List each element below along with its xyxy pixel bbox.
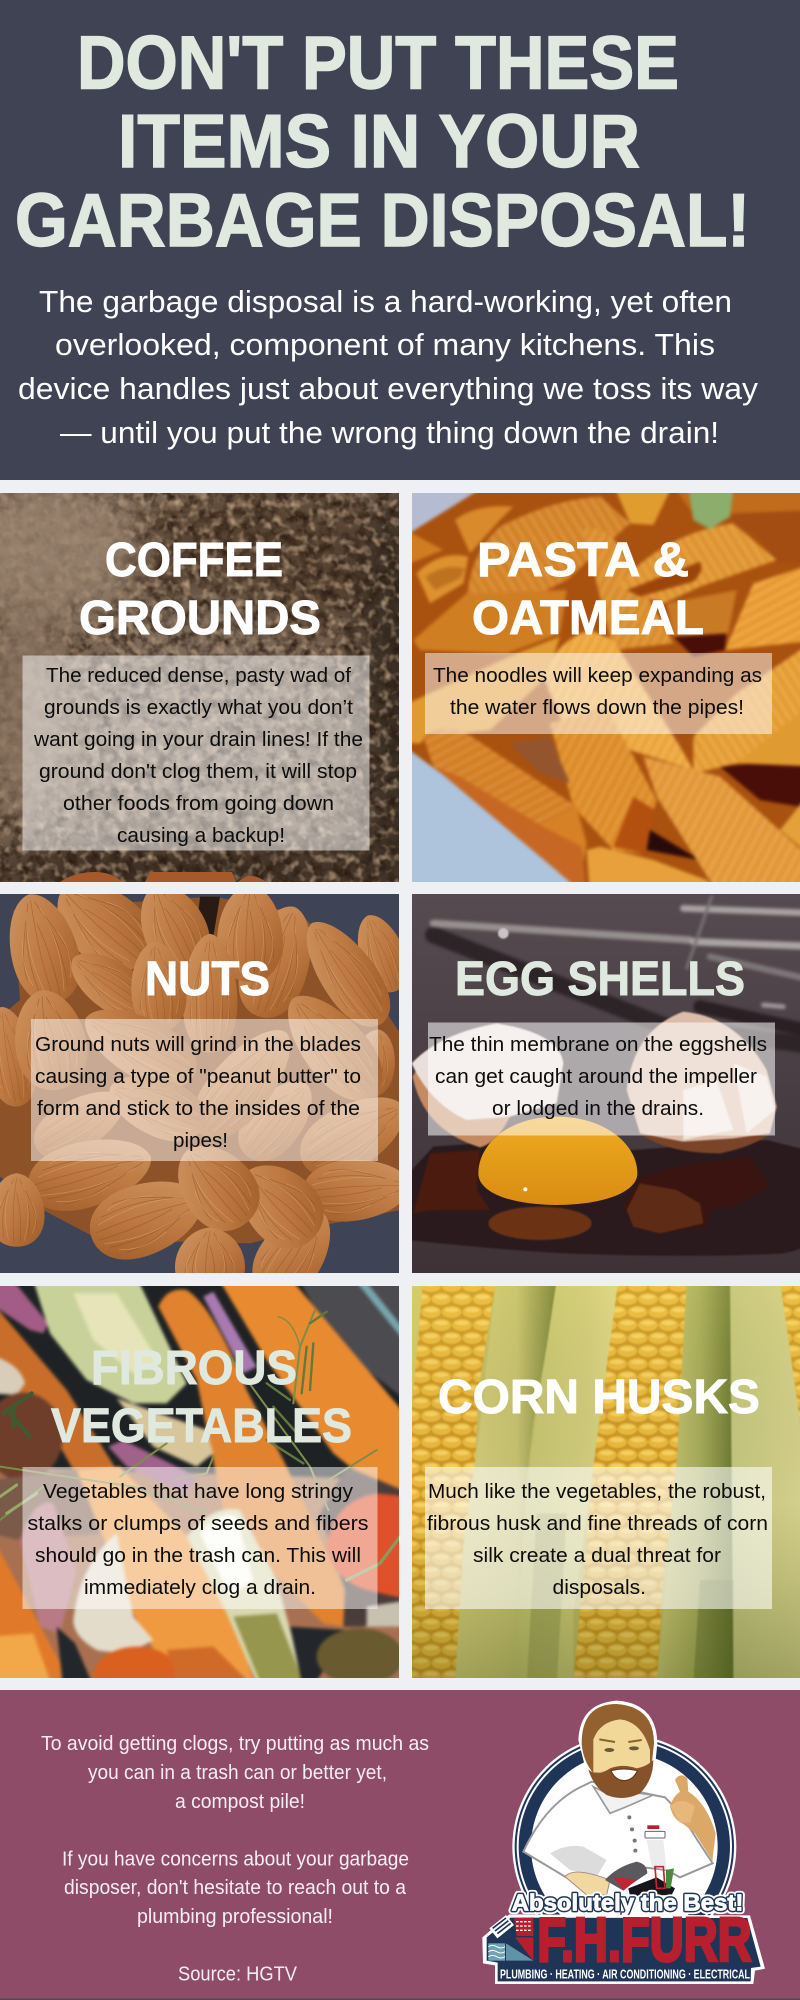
text box: should go in the trash can. This will <box>35 1544 361 1567</box>
text box: Much like the vegetables, the robust, <box>428 1480 766 1503</box>
text box: The reduced dense, pasty wad of <box>46 664 351 687</box>
intro text: — until you put the wrong thing down the drain! <box>60 415 719 450</box>
tagline: Absolutely the Best! <box>512 1890 743 1916</box>
text box: causing a backup! <box>117 824 285 847</box>
heading: COFFEE <box>105 534 283 587</box>
photo: corn cobs <box>407 1280 800 1683</box>
text box <box>425 1467 772 1609</box>
text box <box>428 1022 775 1136</box>
panel: pasta and oatmeal <box>412 493 800 882</box>
text box: The noodles will keep expanding as <box>433 664 762 687</box>
footer text: you can in a trash can or better yet, <box>88 1761 387 1784</box>
banner <box>482 1914 765 1984</box>
text box: other foods from going down <box>63 792 334 815</box>
intro text <box>18 284 759 450</box>
intro text: The garbage disposal is a hard-working, yet often <box>39 284 732 319</box>
footer text: plumbing professional! <box>137 1905 333 1928</box>
footer text: To avoid getting clogs, try putting as much as <box>41 1732 429 1755</box>
text box <box>22 1467 378 1609</box>
panel: coffee grounds <box>0 493 399 882</box>
heading: FIBROUS <box>91 1342 297 1395</box>
text box: causing a type of "peanut butter" to <box>35 1065 361 1088</box>
logo: F.H. Furr mascot and wordmark <box>482 1701 765 1984</box>
text box <box>22 656 370 850</box>
title: ITEMS IN YOUR <box>118 99 640 183</box>
heading: CORN HUSKS <box>438 1371 760 1424</box>
photo: almonds <box>0 894 399 1273</box>
photo: cracked egg <box>393 894 800 1273</box>
panel: header <box>0 0 800 480</box>
heading: GROUNDS <box>79 592 321 645</box>
title: DON'T PUT THESE <box>77 20 679 104</box>
footer text: Source: HGTV <box>178 1962 297 1986</box>
intro text: device handles just about everything we toss its way <box>18 371 759 406</box>
text box: the water flows down the pipes! <box>450 696 744 719</box>
heading: VEGETABLES <box>51 1400 352 1453</box>
photo: coffee grounds <box>0 493 399 882</box>
tagline: Absolutely the Best! <box>512 1890 743 1916</box>
text box: The thin membrane on the eggshells <box>429 1033 767 1056</box>
text box: ground don't clog them, it will stop <box>39 760 357 783</box>
mascot <box>523 1701 716 1895</box>
text box <box>425 653 772 734</box>
text box: immediately clog a drain. <box>84 1576 316 1599</box>
text box: grounds is exactly what you don’t <box>44 696 353 719</box>
photo: roasted vegetables <box>0 1286 399 1678</box>
text box: stalks or clumps of seeds and fibers <box>28 1512 368 1535</box>
text box: or lodged in the drains. <box>492 1097 704 1120</box>
text box: disposals. <box>552 1576 646 1599</box>
text box: fibrous husk and fine threads of corn <box>427 1512 768 1535</box>
footer text <box>41 1732 429 1986</box>
title <box>15 20 750 262</box>
heading: PASTA & <box>477 534 689 587</box>
panel: footer <box>0 1690 800 2000</box>
panel: nuts <box>0 894 399 1273</box>
wordmark icon <box>488 1915 533 1961</box>
heading <box>51 1342 352 1453</box>
text box: silk create a dual threat for <box>473 1544 721 1567</box>
text box: form and stick to the insides of the <box>37 1097 360 1120</box>
tagline: Absolutely the Best! <box>512 1890 743 1916</box>
text box <box>31 1019 378 1161</box>
logo badge ring <box>512 1735 736 1959</box>
text box: Ground nuts will grind in the blades <box>35 1033 361 1056</box>
panel: egg shells <box>393 894 800 1273</box>
heading <box>79 534 321 645</box>
text box: Vegetables that have long stringy <box>43 1480 354 1503</box>
text box: can get caught around the impeller <box>435 1065 757 1088</box>
intro text: overlooked, component of many kitchens. This <box>55 327 715 362</box>
footer text: If you have concerns about your garbage <box>62 1848 409 1870</box>
photo: penne pasta <box>412 493 800 882</box>
heading: NUTS <box>145 953 270 1006</box>
panel: fibrous vegetables <box>0 1286 399 1678</box>
footer text: a compost pile! <box>175 1790 305 1813</box>
heading: OATMEAL <box>472 592 704 645</box>
heading <box>472 534 704 645</box>
text box: want going in your drain lines! If the <box>33 728 363 751</box>
heading: EGG SHELLS <box>455 953 745 1006</box>
tools: wrench and pouch <box>605 1862 675 1896</box>
panel: corn husks <box>407 1280 800 1683</box>
text box: pipes! <box>173 1129 228 1152</box>
footer text: disposer, don't hesitate to reach out to a <box>64 1876 407 1899</box>
